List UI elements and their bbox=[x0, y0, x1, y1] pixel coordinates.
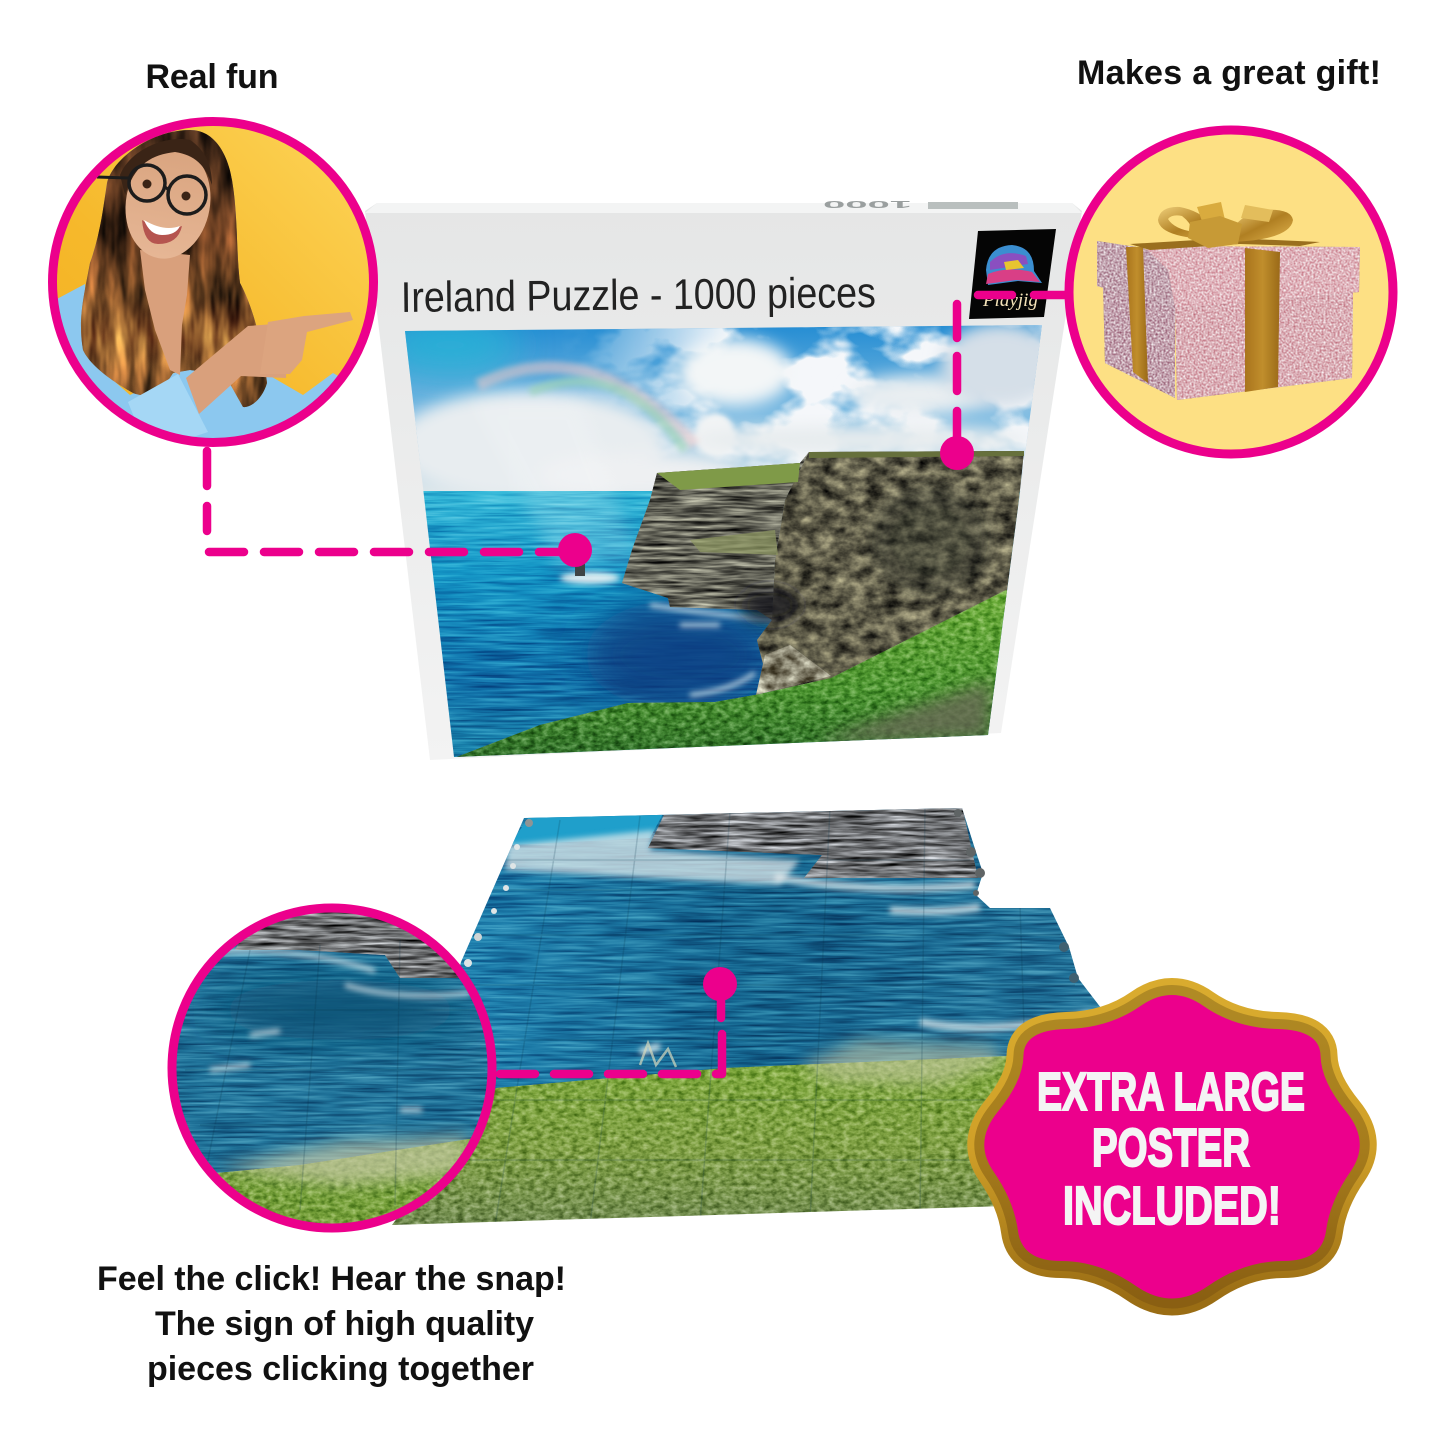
caption: feel the click: pieces clicking together bbox=[147, 1350, 534, 1388]
heading: real fun: Real fun bbox=[146, 58, 278, 96]
badge: extra large poster included: POSTER bbox=[1092, 1118, 1250, 1178]
assembled puzzle bbox=[390, 800, 1110, 1225]
box photo bbox=[380, 315, 1060, 761]
product box bbox=[365, 199, 1082, 761]
caption: feel the click: Feel the click! Hear the snap! bbox=[97, 1260, 566, 1298]
badge: extra large poster included bbox=[984, 995, 1360, 1298]
badge: extra large poster included: EXTRA LARGE bbox=[1037, 1062, 1305, 1122]
box logo bbox=[969, 229, 1056, 319]
caption: feel the click bbox=[97, 1260, 566, 1388]
box title: Ireland Puzzle - 1000 pieces bbox=[401, 269, 876, 322]
connector: person to box bbox=[207, 451, 592, 567]
circle: puzzle close-up bbox=[165, 900, 500, 1235]
caption: feel the click: The sign of high quality bbox=[155, 1305, 534, 1343]
heading: makes a great gift: Makes a great gift! bbox=[1077, 54, 1381, 92]
connector: puzzle detail bbox=[500, 967, 737, 1074]
product box: 1000 bbox=[823, 199, 912, 210]
circle: woman pointing bbox=[50, 120, 380, 452]
box logo: Playjig bbox=[982, 290, 1038, 311]
circle: gift bbox=[1069, 130, 1393, 454]
badge: extra large poster included: INCLUDED! bbox=[1063, 1176, 1281, 1236]
connector: gift to box bbox=[940, 295, 1065, 470]
